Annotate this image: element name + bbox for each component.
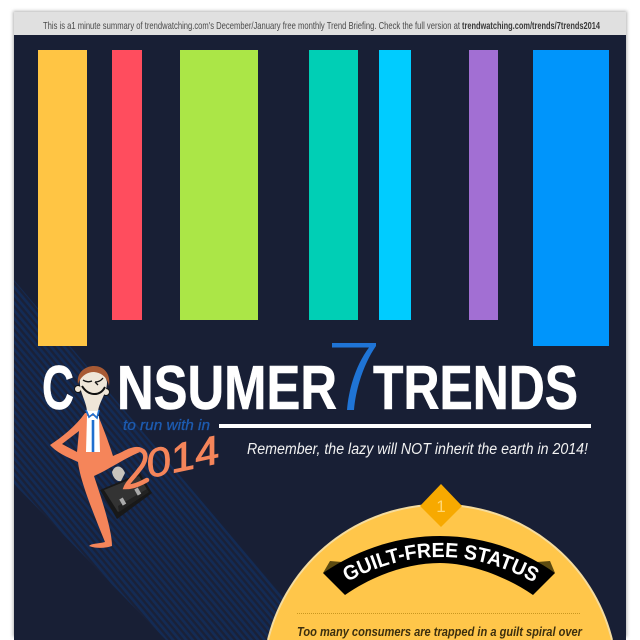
header strip [14, 12, 626, 35]
year 2014 [113, 428, 223, 487]
subtitle: to run with in: to run with in [123, 417, 210, 434]
tagline: Remember, the lazy will NOT inherit the earth in 2014! [247, 441, 589, 458]
yellow circle panel [268, 505, 612, 640]
header strip: This is a1 minute summary of trendwatching.com's December/January free monthly Trend Briefing. Check the full version at [43, 20, 460, 32]
hand [112, 466, 125, 481]
rule under title [219, 424, 591, 428]
number diamond: 1 [436, 497, 446, 516]
mascot running man [50, 366, 152, 548]
head [74, 366, 110, 411]
shirt and tie [86, 410, 100, 452]
diagonal striped band [14, 280, 300, 640]
body and legs [50, 413, 140, 548]
big blue seven [332, 343, 376, 410]
body text: Too many consumers are trapped in a guilt spiral over [297, 625, 583, 639]
title: NSUMER [117, 354, 337, 423]
title: TRENDS [373, 354, 578, 423]
title: C [42, 354, 74, 423]
title [42, 354, 578, 423]
year 2014: 014 [142, 428, 223, 487]
number diamond [420, 484, 462, 527]
ribbon banner: GUILT-FREE STATUS [344, 542, 538, 581]
colour bars [38, 50, 609, 346]
dotted divider [297, 612, 580, 614]
briefcase [100, 473, 152, 519]
